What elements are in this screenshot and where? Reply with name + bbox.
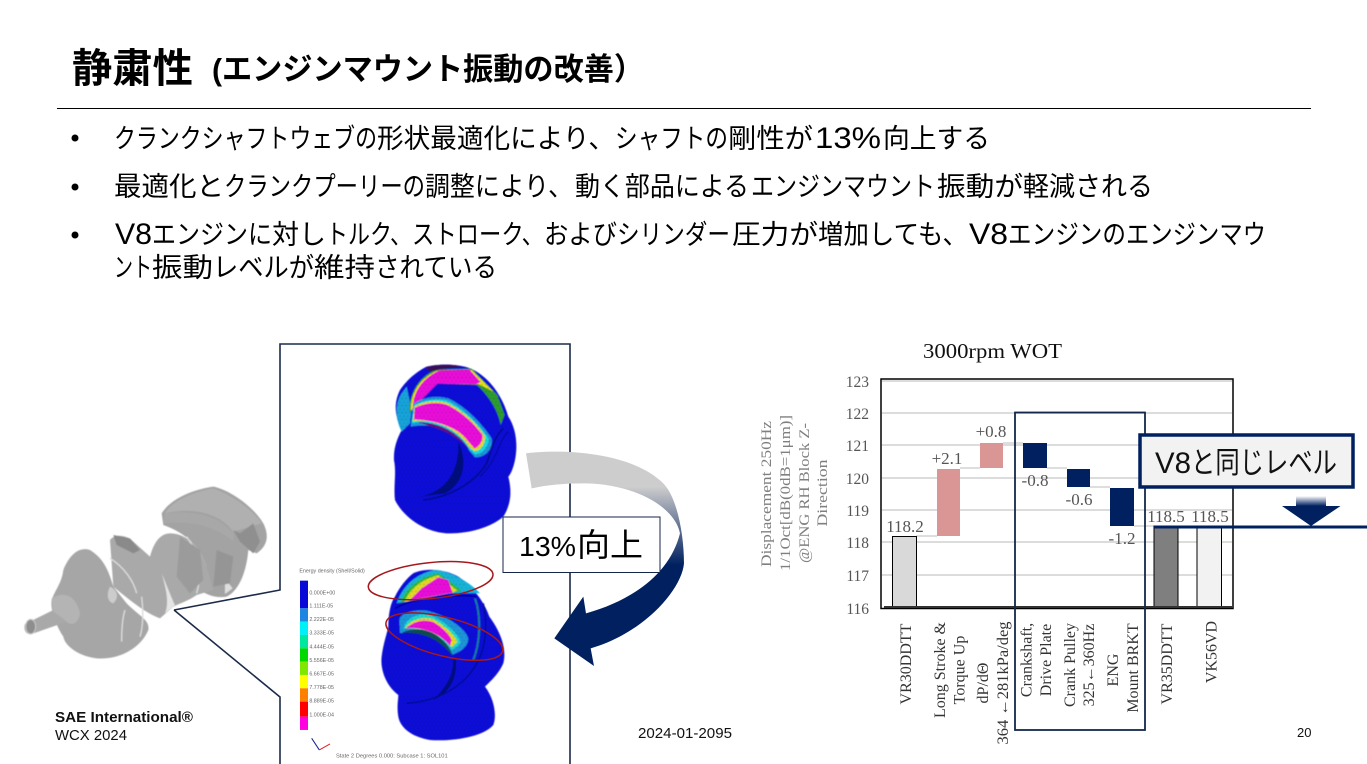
y axis title: Direction [815,459,831,526]
data labels: 118.5 [1191,507,1229,526]
data labels: 118.2 [886,517,924,536]
legend: energy density: 2.222E-05 [309,617,334,623]
page number: 20 [1297,725,1311,740]
x axis labels: 364 ←281kPa/deg [995,622,1012,744]
y axis ticks: 116 [846,601,869,618]
x axis labels: VK56VD [1204,621,1220,683]
bullet 3: 増加しても、 [818,220,968,250]
bullet 3 [72,218,1266,283]
x axis labels: Crankshaft, [1018,623,1036,697]
callout: 13% improvement: 向上 [577,527,643,563]
callout: 13% improvement [503,517,660,572]
footer: source: WCX 2024 [55,727,127,744]
FE analysis panel [299,365,516,759]
bullet 3: エンジンの [1008,220,1126,250]
curved arrow [526,452,684,666]
title [72,47,644,91]
bullet 1: 13% [815,122,881,155]
bullet 2: 振動が [937,172,1023,202]
legend: energy density: 5.556E-05 [309,658,334,664]
callout frame linking crankshaft to FE view [174,344,570,764]
legend: energy density [299,569,448,759]
y axis title: Displacement 250Hz [759,421,775,567]
bullet 1 [72,122,990,155]
bullet 3: シリンダー [617,220,730,250]
x axis labels: 325←360Hz [1081,624,1098,706]
bullet 3: エンジンに [152,220,272,250]
bullet 3: 振動 [152,253,213,283]
footer: source [55,710,193,744]
footer: paper number: 2024-01-2095 [638,725,732,742]
x axis labels: ENG [1105,653,1122,686]
bullet 3: ストローク、 [412,220,544,250]
V8 level reference line [1154,526,1367,528]
y axis title [759,415,831,571]
bullet list [72,122,1266,283]
bullet 3: 圧力が [732,220,818,250]
bullet 3: および [544,220,617,250]
bullet 2: 調整により、 [425,172,573,202]
bullet 3: されている [375,253,497,283]
legend: energy density: 3.333E-05 [309,631,334,637]
bullet 2: 軽減される [1023,172,1153,202]
x axis labels: VR35DDTT [1159,623,1176,704]
legend: energy density: 7.778E-05 [309,685,334,691]
x axis labels: dP/dΘ [975,663,992,703]
callout: same level as V8: V8 [1155,447,1191,480]
x axis labels: Crank Pulley [1062,623,1079,707]
bullet 3: ント [114,253,152,283]
legend: energy density: 8.889E-05 [309,699,334,705]
y axis ticks: 121 [846,438,869,455]
y axis ticks: 117 [846,568,869,585]
icon: crankshaft [24,487,267,658]
highlight ellipses [366,556,507,670]
x axis labels: Torque Up [952,636,968,704]
highlight box around crank items [1015,412,1145,730]
y axis title: @ENG RH Block Z- [797,423,813,563]
y axis ticks: 122 [846,406,869,423]
bullet 2: クランクプーリーの [224,172,425,202]
bars [892,443,1222,608]
y axis title: 1/1Oct[dB(0dB=1μm)] [778,415,794,571]
bullet 2: エンジンマウント [751,172,935,202]
x axis labels: Mount BRKT [1125,623,1142,713]
y axis ticks: 123 [846,374,869,391]
bullet 3: V8 [115,218,152,251]
waterfall chart [759,374,1233,744]
data labels [886,422,1229,548]
bullet 1: 形状最適化により、 [377,124,615,154]
legend: energy density: 1.000E-04 [309,712,334,718]
x axis labels [898,621,1220,744]
data labels: -0.6 [1066,490,1092,509]
title: 静粛性 [72,47,193,91]
title: (エンジンマウント振動の改善） [212,52,644,87]
legend: energy density: State 2 Degrees 0.000: Subcase 1: SOL101 [336,753,448,759]
data labels: -0.8 [1022,471,1048,490]
callout: 13% improvement: 13% [519,531,576,562]
x axis labels: VR30DDTT [898,623,915,704]
legend: energy density: Energy density (Shell/Solid) [299,569,365,575]
bullet 3: エンジンマウ [1126,220,1266,250]
bullet 1: 向上する [883,124,990,154]
bullet 1: 剛性が [728,124,813,154]
bullet 2: 動く部品による [575,172,749,202]
connector lines [916,443,1154,536]
bullet 3: トルク、 [326,220,412,250]
bullet 2 [72,172,1153,202]
bullet 3: 対し [272,220,326,250]
y axis ticks: 120 [846,471,869,488]
data labels: +0.8 [976,422,1006,441]
data labels: 118.5 [1147,507,1185,526]
bullet 3: 維持 [314,253,375,283]
data labels: +2.1 [932,449,962,468]
data labels: -1.2 [1109,529,1135,548]
bullet 3: レベルが [213,253,314,283]
footer: source: SAE International® [55,710,193,726]
legend: energy density: 4.444E-05 [309,644,334,650]
bullet 1: シャフトの [615,124,728,154]
bullet 3: V8 [969,218,1008,251]
down arrow [1282,496,1340,526]
FE model: after optimisation [381,570,504,740]
callout: same level as V8 [1140,435,1353,487]
bullet 2: 最適化と [114,172,224,202]
y axis ticks [846,374,869,618]
y axis ticks: 118 [846,535,869,552]
legend: energy density: 6.667E-05 [309,671,334,677]
FE model: before optimisation [394,365,516,533]
bullet 1: クランクシャフトウェブの [114,124,377,154]
legend: energy density: 1.111E-05 [309,604,333,610]
callout: same level as V8: と同じレベル [1191,447,1337,480]
y axis ticks: 119 [846,503,869,520]
plot frame [881,379,1233,608]
x axis labels: Drive Plate [1038,624,1055,696]
chart title: 3000rpm WOT [923,339,1062,363]
legend: energy density: 0.000E+00 [309,590,335,596]
x axis labels: Long Stroke & [932,621,949,718]
